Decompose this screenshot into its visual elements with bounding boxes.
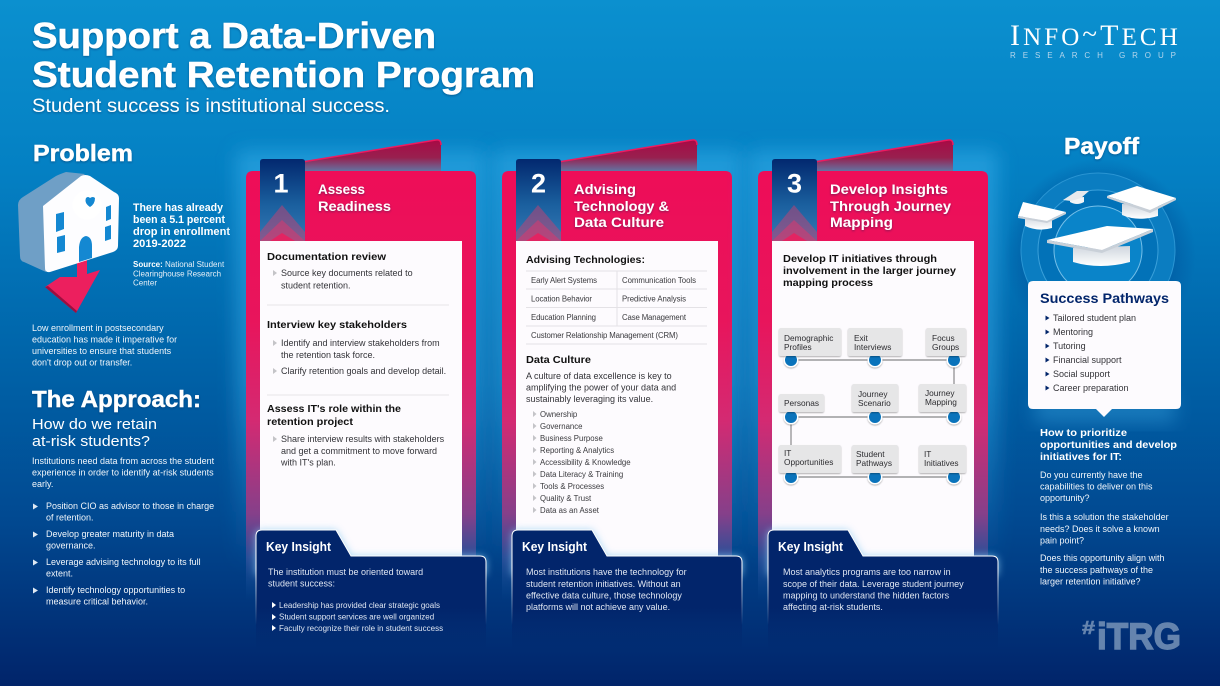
subheading (32, 416, 157, 450)
questions: Do you currently have the (1040, 470, 1143, 480)
table: advising technologies: Advising Technologies: (526, 254, 645, 266)
section: assess IT's role: and get a commitment to move forward (281, 446, 437, 456)
key insight (256, 530, 486, 650)
chart: journey map flow: Scenario (858, 398, 891, 408)
chart: journey map flow: Journey (925, 388, 955, 398)
callout: success pathways (1028, 281, 1181, 423)
section: interview key stakeholders: Interview key stakeholders (267, 319, 407, 331)
section: data culture (526, 354, 676, 404)
heading: Develop Insights (830, 182, 948, 197)
source note (133, 260, 225, 288)
key insight: Key Insight (522, 540, 588, 554)
list: data culture elements: Business Purpose (540, 434, 603, 443)
text: journey mapping intro: Develop IT initiatives through (783, 253, 937, 265)
chart: journey map flow: Personas (784, 398, 819, 408)
section: data culture: amplifying the power of your data and (526, 382, 676, 392)
small cap (1070, 197, 1084, 204)
logo: Info-Tech Research Group: ~ (1082, 19, 1100, 49)
text: low enrollment: Low enrollment in postsecondary (32, 323, 164, 333)
logo: Info-Tech Research Group: ECH (1122, 24, 1181, 51)
section: documentation review: student retention. (281, 280, 351, 290)
key insight: Key Insight (266, 540, 332, 554)
questions: Does this opportunity align with (1040, 553, 1165, 563)
logo: Info-Tech Research Group: T (1100, 19, 1122, 52)
chart: journey map flow: Initiatives (924, 458, 959, 468)
questions: opportunity? (1040, 493, 1090, 503)
section: interview key stakeholders: Identify and interview stakeholders from (281, 338, 440, 348)
key insight: effective data culture, those technology (526, 590, 682, 600)
callout: success pathways: Mentoring (1053, 327, 1093, 337)
large cap (1073, 246, 1130, 266)
number ribbon: 1 (273, 168, 289, 198)
heading (830, 182, 952, 230)
bullet list: Identify technology opportunities to (46, 585, 185, 595)
list: data culture elements: Governance (540, 422, 582, 431)
source note: Source: National Student (133, 260, 225, 269)
logo: #iTRG hashtag: iTRG (1097, 616, 1181, 657)
panel: problem (18, 140, 230, 368)
heading (574, 182, 669, 230)
callout: enrollment drop: drop in enrollment (133, 226, 230, 238)
number ribbon (516, 159, 561, 241)
text: journey mapping intro: involvement in the larger journey (783, 265, 956, 277)
key insight: scope of their data. Leverage student journey (783, 579, 964, 589)
text: journey mapping intro: mapping process (783, 277, 873, 289)
text: intro: Institutions need data from across the student (32, 456, 215, 466)
title: Student Retention Program (32, 54, 535, 95)
icon: graduation caps and rings (1004, 159, 1196, 351)
panel: step 3 develop insights through journey mapping (748, 140, 998, 650)
callout: success pathways: Tailored student plan (1053, 313, 1136, 323)
heading: Through Journey (830, 199, 952, 214)
callout: success pathways: Career preparation (1053, 383, 1129, 393)
callout: enrollment drop: been a 5.1 percent (133, 214, 225, 226)
heading: how to prioritize: initiatives for IT: (1040, 451, 1122, 463)
questions: needs? Does it solve a known (1040, 524, 1160, 534)
section: assess IT's role: Assess IT's role within the (267, 403, 401, 415)
questions: larger retention initiative? (1040, 576, 1141, 586)
section: assess IT's role: retention project (267, 416, 354, 428)
callout: success pathways: Success Pathways (1040, 291, 1169, 306)
key insight: Most analytics programs are too narrow in (783, 567, 951, 577)
chart: journey map flow: Groups (932, 342, 959, 352)
list: data culture elements: Tools & Processes (540, 482, 604, 491)
table: advising technologies: Communication Tools (622, 276, 696, 285)
number ribbon (772, 159, 817, 241)
icon: school building with falling arrow (18, 172, 119, 313)
chart: journey map flow: Demographic (784, 333, 833, 343)
heading: the approach: The Approach: (32, 386, 201, 412)
callout: success pathways: Social support (1053, 369, 1111, 379)
key insight (512, 530, 742, 650)
bullet list: Leverage advising technology to its full (46, 557, 201, 567)
section: documentation review: Source key documents related to (281, 268, 413, 278)
chart: journey map flow: Student (856, 449, 885, 459)
chart: journey map flow: Interviews (854, 342, 891, 352)
chart: journey map flow: IT (784, 448, 791, 458)
bullet list: Develop greater maturity in data (46, 529, 174, 539)
table: advising technologies: Case Management (622, 313, 687, 322)
chart: journey map flow: Opportunities (784, 457, 833, 467)
heading: how to prioritize: How to prioritize (1040, 427, 1127, 439)
list: data culture elements: Accessibility & Knowledge (540, 458, 631, 467)
panel: step 1 assess readiness (236, 140, 486, 650)
heading: Readiness (318, 199, 391, 214)
section: interview key stakeholders (267, 319, 446, 376)
list: data culture elements: Quality & Trust (540, 494, 592, 503)
table: advising technologies: Early Alert Systems (531, 276, 597, 285)
heading: how to prioritize: opportunities and develop (1040, 439, 1177, 451)
title: Support a Data-Driven (32, 15, 436, 56)
questions: pain point? (1040, 536, 1084, 546)
key insight: Faculty recognize their role in student success (279, 624, 443, 633)
callout: enrollment drop: 2019-2022 (133, 238, 186, 250)
heading: Assess (318, 182, 365, 197)
questions (1040, 470, 1169, 586)
section: data culture: Data Culture (526, 354, 591, 366)
logo: Info-Tech Research Group (1010, 19, 1181, 60)
logo: Info-Tech Research Group: INFO (1010, 19, 1082, 52)
table: advising technologies: Predictive Analysis (622, 294, 686, 304)
bullet list: extent. (46, 568, 73, 578)
list: data culture elements (533, 410, 631, 515)
source note: Center (133, 278, 157, 288)
callout: success pathways: Tutoring (1053, 341, 1086, 351)
chart: journey map flow: Exit (854, 333, 869, 343)
right cap (1122, 204, 1158, 219)
questions: capabilities to deliver on this (1040, 482, 1153, 492)
key insight (768, 530, 998, 650)
text: intro: experience in order to identify at-risk students (32, 468, 214, 478)
section: interview key stakeholders: the retention task force. (281, 350, 375, 360)
chart: journey map flow: Mapping (925, 397, 957, 407)
panel: step 2 advising technology and data culture (492, 140, 742, 650)
panel: the approach (32, 386, 215, 606)
chart: journey map flow: Focus (932, 333, 955, 343)
section: interview key stakeholders: Clarify retention goals and develop detail. (281, 366, 446, 376)
heading: how to prioritize (1040, 427, 1177, 463)
callout: success pathways: Financial support (1053, 355, 1122, 365)
chart: journey map flow (779, 328, 966, 484)
text: journey mapping intro (783, 253, 956, 289)
heading: payoff: Payoff (1064, 133, 1139, 159)
section: assess IT's role (267, 403, 445, 468)
table: advising technologies: Location Behavior (531, 294, 592, 304)
callout: enrollment drop (133, 202, 230, 250)
section: documentation review: Documentation review (267, 251, 387, 263)
bullet list: Position CIO as advisor to those in charge (46, 501, 214, 511)
heading: problem: Problem (33, 140, 133, 166)
text: intro (32, 456, 215, 489)
list: data culture elements: Ownership (540, 410, 578, 419)
chart: journey map flow: Profiles (784, 342, 812, 352)
section: documentation review (267, 251, 413, 290)
table: advising technologies (526, 254, 707, 344)
heading: Technology & (574, 199, 669, 214)
title block (32, 15, 535, 117)
section: assess IT's role: Share interview results with stakeholders (281, 434, 445, 444)
text: intro: early. (32, 479, 53, 489)
callout: enrollment drop: There has already (133, 202, 224, 214)
heading (318, 182, 391, 214)
questions: Is this a solution the stakeholder (1040, 512, 1169, 522)
heading: Advising (574, 182, 636, 197)
chart: journey map flow: Pathways (856, 458, 892, 468)
heading: Data Culture (574, 215, 665, 230)
subheading: at-risk students? (32, 433, 150, 450)
number ribbon: 2 (531, 168, 546, 198)
logo: Info-Tech Research Group: RESEARCH GROUP (1010, 51, 1176, 60)
title (32, 15, 535, 95)
number ribbon: 3 (787, 168, 802, 198)
key insight: mapping to understand the hidden factors (783, 590, 950, 600)
text: low enrollment (32, 323, 177, 368)
bullet list (33, 501, 214, 606)
key insight: Most institutions have the technology for (526, 567, 687, 577)
key insight: student retention initiatives. Without an (526, 579, 681, 589)
key insight: affecting at-risk students. (783, 602, 883, 612)
key insight: platforms will not achieve any value. (526, 602, 670, 612)
questions: the success pathways of the (1040, 565, 1153, 575)
key insight: Key Insight (778, 540, 844, 554)
panel: payoff (1004, 133, 1196, 586)
table: advising technologies: Customer Relationship Management (CRM) (531, 331, 678, 340)
section: assess IT's role: with IT's plan. (280, 458, 336, 468)
heading: Mapping (830, 215, 893, 230)
chart: journey map flow: Journey (858, 389, 888, 399)
chart: journey map flow: IT (924, 449, 931, 459)
list: data culture elements: Data as an Asset (540, 506, 600, 515)
key insight: Student support services are well organized (279, 612, 434, 622)
left cap (1025, 216, 1052, 230)
key insight: The institution must be oriented toward (268, 567, 423, 577)
bullet list: measure critical behavior. (46, 596, 148, 606)
section: data culture: sustainably leveraging its value. (526, 394, 653, 404)
bullet list: governance. (46, 540, 96, 550)
key insight: student success: (268, 578, 335, 588)
text: low enrollment: don't drop out or transfer. (32, 358, 132, 368)
list: data culture elements: Data Literacy & Training (540, 470, 623, 479)
bullet list: of retention. (46, 512, 94, 522)
section: data culture: A culture of data excellence is key to (526, 371, 672, 381)
subtitle: Student success is institutional success. (32, 96, 390, 117)
logo: #iTRG hashtag: # (1082, 618, 1095, 638)
list: data culture elements: Reporting & Analytics (540, 446, 614, 455)
key insight: Leadership has provided clear strategic goals (279, 601, 440, 610)
subheading: How do we retain (32, 416, 157, 433)
number ribbon (260, 159, 305, 241)
source note: Clearinghouse Research (133, 270, 221, 278)
table: advising technologies: Education Planning (531, 313, 596, 322)
text: low enrollment: universities to ensure that students (32, 346, 172, 356)
text: low enrollment: education has made it imperative for (32, 334, 177, 344)
